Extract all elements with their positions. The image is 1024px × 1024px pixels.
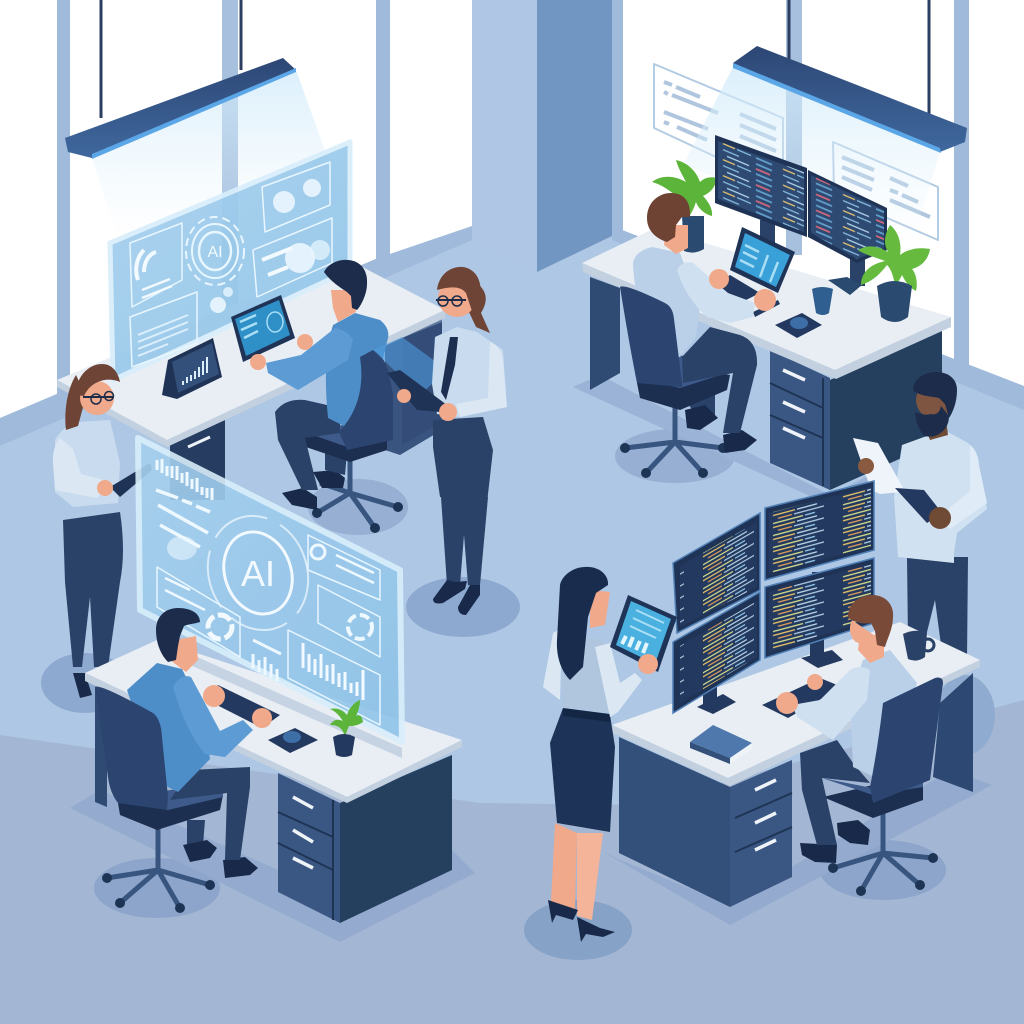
hologram: bottom left bbox=[138, 438, 402, 742]
keyboard: bottom left bbox=[207, 685, 280, 728]
desk: top right bbox=[582, 228, 951, 490]
desk: top left bbox=[57, 258, 445, 500]
plant: right of monitors bbox=[858, 225, 930, 322]
central pillar bbox=[472, 0, 612, 272]
floating panel: top right A bbox=[654, 64, 783, 170]
hanging lamp left bbox=[65, 0, 350, 240]
shadow: desk bottom right leg bbox=[935, 675, 995, 755]
person: woman bottom center bbox=[543, 567, 677, 942]
shadow: person center bbox=[406, 577, 520, 637]
right window wall bbox=[612, 0, 1024, 410]
plant: behind monitors bbox=[652, 160, 717, 253]
chair base: top right bbox=[620, 400, 728, 478]
plant: bottom left bbox=[330, 700, 363, 757]
shadow: person left bbox=[41, 653, 129, 713]
person: seated man bottom right bbox=[776, 595, 923, 863]
hologram: top left bbox=[110, 142, 350, 380]
floating panel: top right B bbox=[833, 142, 938, 240]
person: seated man bottom left bbox=[118, 608, 272, 878]
book on desk bbox=[690, 725, 752, 764]
hanging lamp right bbox=[683, 0, 967, 250]
keyboard: bottom right bbox=[762, 678, 842, 718]
person: woman center bbox=[387, 267, 507, 615]
chair back: top left bbox=[339, 350, 393, 450]
lower floor shade bbox=[0, 700, 1024, 1024]
chair base: bottom right bbox=[828, 810, 938, 896]
laptop: top right bbox=[713, 227, 795, 317]
desk floor shadow bottom right bbox=[600, 770, 992, 925]
shadow: chair bottom left bbox=[94, 858, 220, 918]
mouse pad: top right bbox=[775, 313, 822, 338]
desk floor shadow top right bbox=[573, 375, 880, 510]
AI label: AI bbox=[207, 244, 223, 261]
AI label: AI bbox=[241, 553, 275, 594]
shadow: chair top left bbox=[308, 479, 408, 535]
mug: bottom right bbox=[903, 631, 934, 661]
chair back: top right bbox=[620, 286, 682, 387]
left window wall bbox=[0, 0, 472, 446]
tablet glow bbox=[373, 337, 447, 395]
mug: top right bbox=[812, 287, 833, 315]
desk tablet stand bbox=[162, 338, 222, 399]
person: seated man top right bbox=[633, 193, 776, 453]
person: bearded man right bbox=[853, 372, 987, 660]
desk: bottom right bbox=[612, 622, 980, 907]
desk: bottom left bbox=[85, 640, 462, 923]
chair base: bottom left bbox=[102, 825, 215, 913]
AI ring bbox=[186, 217, 244, 285]
person: seated man top left bbox=[250, 260, 388, 510]
monitors: top right bbox=[715, 135, 887, 295]
chair base: top left bbox=[312, 455, 403, 533]
shadow: chair top right bbox=[615, 429, 735, 483]
AI ring bbox=[192, 502, 324, 644]
mouse pad: bottom left bbox=[268, 728, 318, 753]
monitors: bottom right bbox=[673, 481, 874, 714]
shadow: person bottom bbox=[524, 900, 632, 960]
chair back: bottom left bbox=[95, 687, 168, 810]
desk floor shadow bottom left bbox=[70, 790, 475, 942]
person: woman left bbox=[53, 364, 152, 698]
shadow: chair bottom right bbox=[820, 840, 946, 900]
laptop: top left bbox=[231, 295, 295, 362]
chair back: bottom right bbox=[870, 678, 943, 803]
